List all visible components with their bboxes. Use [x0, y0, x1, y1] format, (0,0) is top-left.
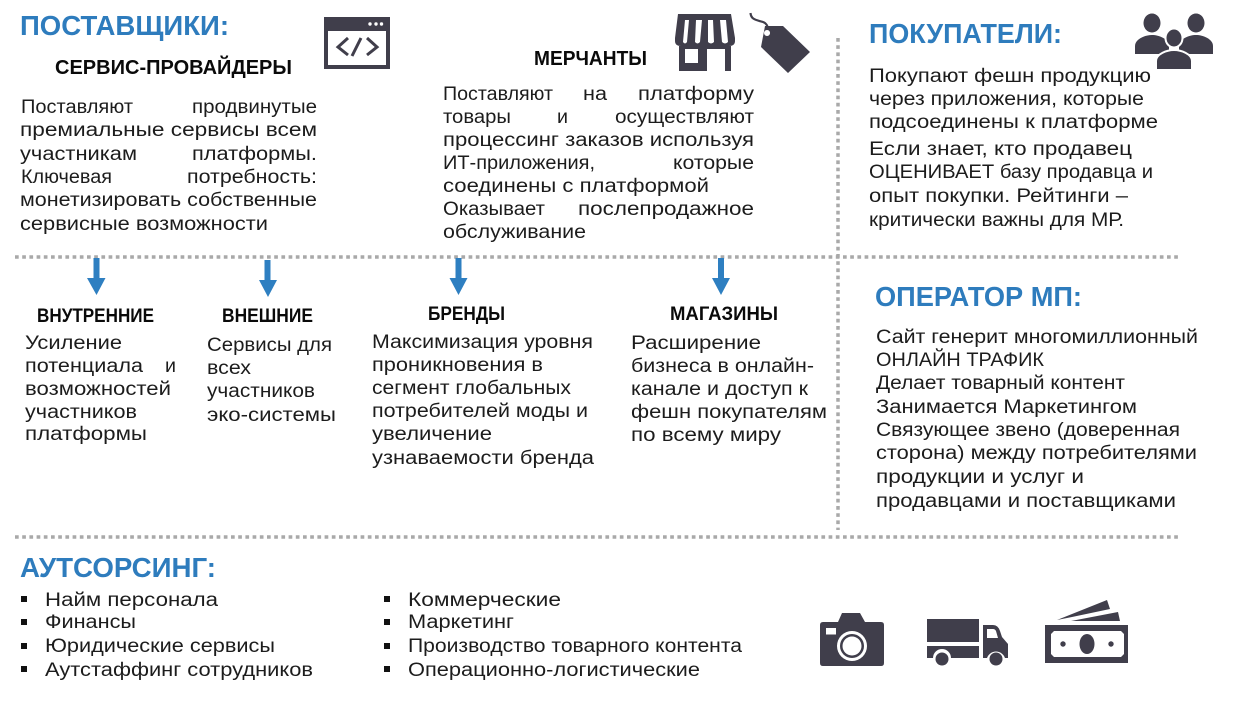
heading: buyers: ПОКУПАТЕЛИ:: [869, 18, 1062, 49]
text: merchants description: процессинг заказов используя: [443, 130, 754, 151]
list: outsourcing left: Аутстаффинг сотрудников: [45, 660, 313, 681]
column: brands: Максимизация уровня: [372, 332, 593, 353]
column: brands: сегмент глобальных: [372, 378, 572, 399]
column: stores: канале и доступ к: [631, 379, 809, 400]
text: merchants description: на: [583, 84, 607, 105]
heading: outsourcing: АУТСОРСИНГ:: [20, 552, 216, 583]
column: stores: [631, 304, 827, 446]
text: service providers description: монетизировать собственные: [20, 190, 317, 211]
list: outsourcing right: [384, 590, 742, 681]
column: stores: МАГАЗИНЫ: [670, 304, 778, 325]
list: outsourcing right: Коммерческие: [408, 590, 561, 611]
subheading: merchants: МЕРЧАНТЫ: [534, 48, 647, 70]
icon: people: [1135, 14, 1213, 70]
text: service providers description: Поставляют: [21, 97, 133, 118]
text: operator description: Занимается Маркетингом: [876, 397, 1137, 418]
column: internal: Усиление: [25, 333, 122, 354]
heading: suppliers: ПОСТАВЩИКИ:: [20, 10, 229, 41]
text: operator description: продукции и услуг и: [876, 467, 1084, 488]
text: buyers description: подсоединены к платформе: [869, 112, 1158, 133]
text: merchants description: Оказывает: [443, 199, 545, 220]
text: buyers description: Если знает, кто продавец: [869, 139, 1132, 160]
column: brands: БРЕНДЫ: [428, 304, 505, 325]
text: merchants description: ИТ-приложения,: [443, 153, 595, 174]
heading: marketplace operator: ОПЕРАТОР МП:: [875, 281, 1082, 312]
column: internal: потенциала: [25, 356, 143, 377]
text: merchants description: послепродажное: [578, 199, 754, 220]
text: merchants description: и: [557, 107, 568, 128]
text: merchants description: соединены с платформой: [443, 176, 709, 197]
text: operator description: ОНЛАЙН ТРАФИК: [876, 349, 1044, 371]
arrow: stores: [712, 258, 730, 295]
icon: store: [675, 14, 735, 71]
text: service providers description: [20, 97, 317, 235]
text: buyers description: критически важны для МР.: [869, 210, 1124, 231]
text: service providers description: продвинутые: [192, 97, 317, 118]
list: outsourcing right: Маркетинг: [408, 612, 514, 633]
column: internal: [25, 306, 176, 445]
subheading: service providers: СЕРВИС-ПРОВАЙДЕРЫ: [55, 55, 292, 79]
text: merchants description: товары: [443, 107, 511, 128]
column: stores: Расширение: [631, 333, 761, 354]
text: operator description: продавцами и поставщиками: [876, 491, 1176, 512]
column: external: Сервисы для: [207, 335, 332, 356]
column: stores: фешн покупателям: [631, 402, 827, 423]
text: operator description: сторона) между потребителями: [876, 443, 1197, 464]
column: brands: проникновения в: [372, 355, 543, 376]
column: internal: возможностей: [25, 379, 171, 400]
column: stores: по всему миру: [631, 425, 782, 446]
column: external: эко-системы: [207, 405, 336, 426]
text: operator description: [876, 327, 1198, 512]
icon: price tag: [750, 13, 810, 73]
text: service providers description: сервисные возможности: [20, 214, 268, 235]
text: merchants description: Поставляют: [443, 84, 553, 105]
column: external: ВНЕШНИЕ: [222, 306, 313, 327]
column: internal: платформы: [25, 424, 147, 445]
icon: truck: [927, 619, 1008, 666]
text: service providers description: потребность:: [187, 167, 317, 188]
column: internal: ВНУТРЕННИЕ: [37, 306, 154, 327]
icon: money: [1045, 600, 1128, 663]
list: outsourcing right: Производство товарного контента: [408, 636, 742, 657]
text: buyers description: ОЦЕНИВАЕТ базу продавца и: [869, 162, 1153, 183]
icon: camera: [820, 613, 884, 666]
column: stores: бизнеса в онлайн-: [631, 356, 814, 377]
list: outsourcing left: Финансы: [45, 612, 136, 633]
text: buyers description: [869, 66, 1158, 231]
column: brands: узнаваемости бренда: [372, 448, 594, 469]
column: brands: потребителей моды и: [372, 401, 588, 422]
column: internal: участников: [25, 402, 137, 423]
text: operator description: Сайт генерит многомиллионный: [876, 327, 1198, 348]
column: internal: и: [165, 356, 176, 377]
list: outsourcing left: Юридические сервисы: [45, 636, 275, 657]
arrow: brands: [450, 258, 468, 295]
text: merchants description: которые: [673, 153, 754, 174]
column: brands: увеличение: [372, 424, 492, 445]
text: merchants description: осуществляют: [615, 107, 754, 128]
text: buyers description: опыт покупки. Рейтинги –: [869, 186, 1128, 207]
column: brands: [372, 304, 594, 469]
text: merchants description: платформу: [638, 84, 755, 105]
arrow: external: [259, 260, 277, 297]
column: external: всех: [207, 358, 252, 379]
text: buyers description: через приложения, которые: [869, 89, 1144, 110]
column: external: участников: [207, 381, 315, 402]
column: external: [207, 306, 336, 426]
text: service providers description: участникам: [20, 144, 137, 165]
arrow: internal: [87, 258, 106, 295]
list: outsourcing left: [21, 590, 313, 681]
text: operator description: Связующее звено (доверенная: [876, 420, 1180, 441]
list: outsourcing right: Операционно-логистические: [408, 660, 700, 681]
text: buyers description: Покупают фешн продукцию: [869, 66, 1151, 87]
text: merchants description: обслуживание: [443, 222, 586, 243]
text: service providers description: премиальные сервисы всем: [20, 120, 317, 141]
text: service providers description: Ключевая: [21, 167, 112, 188]
icon: code window: [324, 17, 390, 69]
text: operator description: Делает товарный контент: [876, 373, 1125, 394]
text: service providers description: платформы.: [192, 144, 317, 165]
text: merchants description: [443, 84, 755, 243]
list: outsourcing left: Найм персонала: [45, 590, 218, 611]
